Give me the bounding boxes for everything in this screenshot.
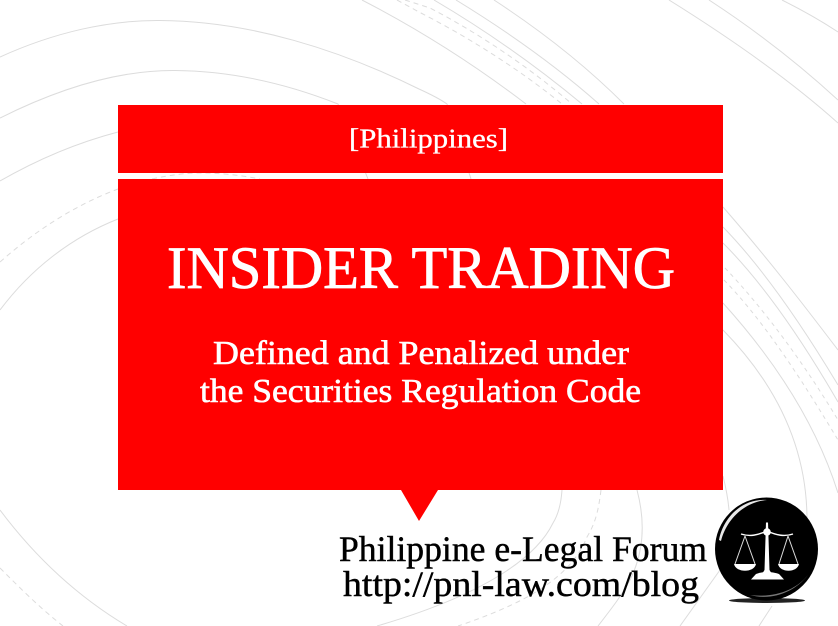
panel: top banner: [118, 105, 723, 173]
forum name and url: [339, 529, 707, 604]
forum name and url: Philippine e-Legal Forum: [339, 529, 707, 569]
banner label: [Philippines]: [349, 124, 508, 154]
forum name and url: http://pnl-law.com/blog: [343, 564, 699, 604]
panel: main callout: [118, 179, 723, 521]
subtitle: Defined and Penalized under: [213, 335, 630, 372]
subtitle: the Securities Regulation Code: [200, 373, 641, 410]
title: INSIDER TRADING: [167, 235, 675, 301]
icon: scales of justice badge: [715, 498, 818, 603]
subtitle: [200, 335, 641, 410]
